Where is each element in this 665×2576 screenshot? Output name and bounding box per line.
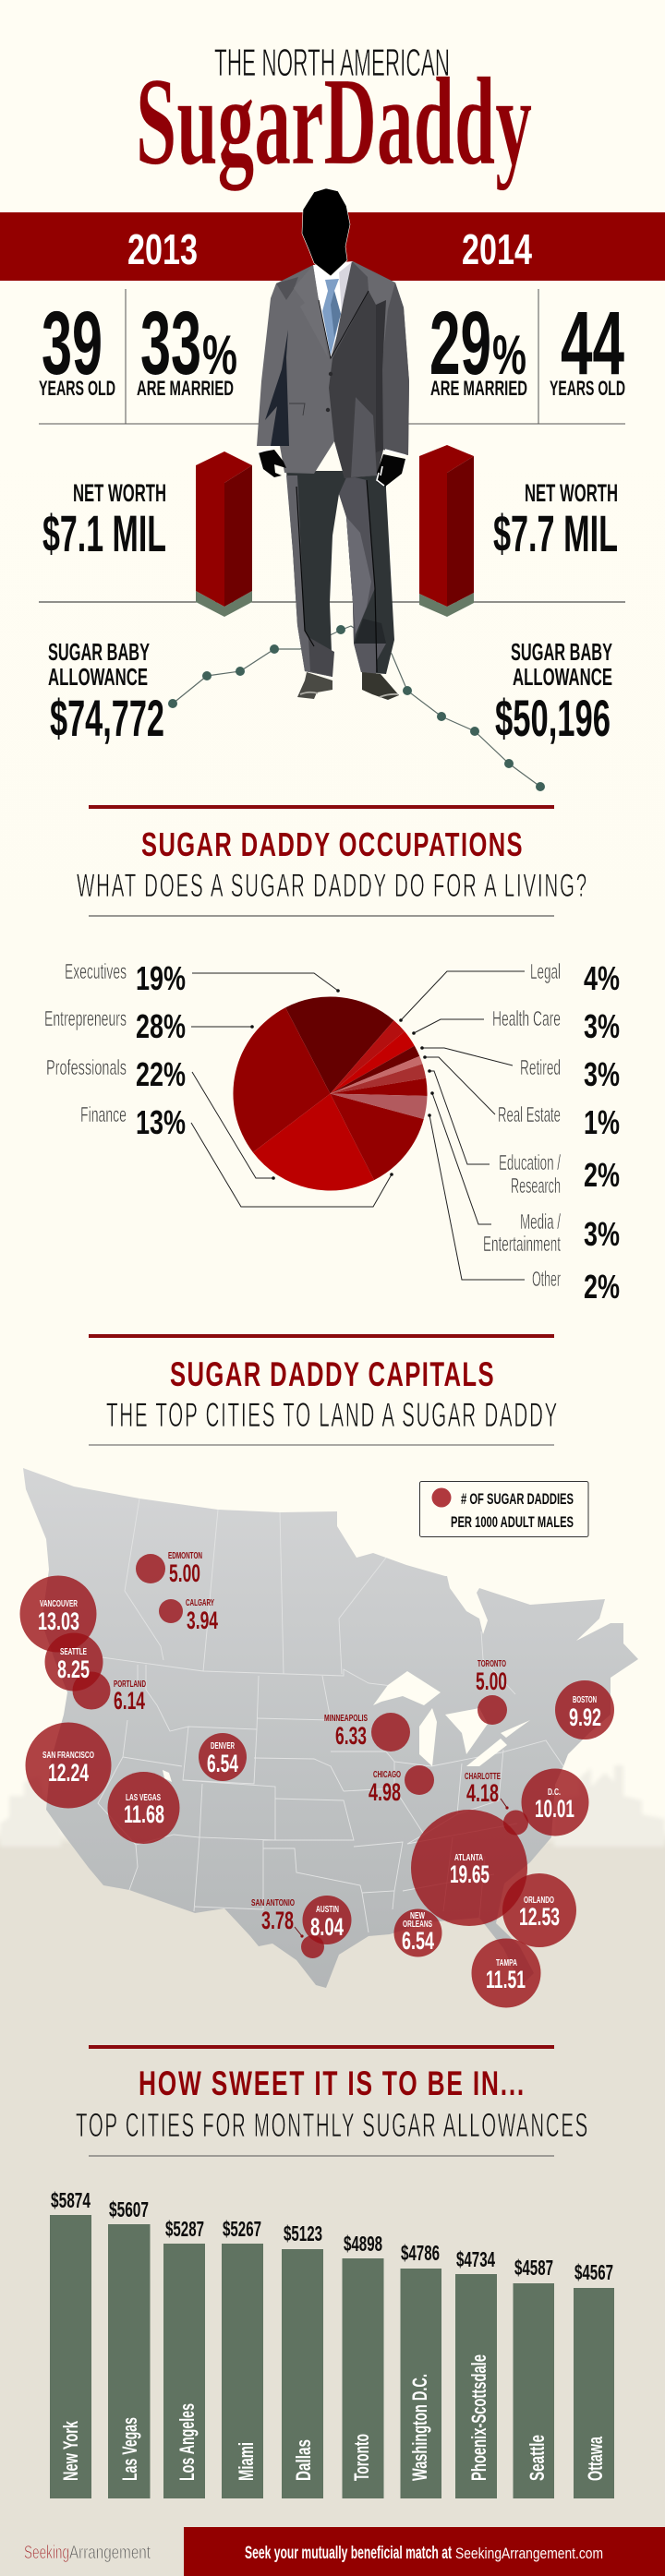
pie labels left: 28% — [136, 1007, 186, 1045]
allowance line chart — [168, 625, 545, 791]
year 2014: 2014 — [462, 225, 532, 273]
legend box: PER 1000 ADULT MALES — [451, 1513, 574, 1531]
pie labels right: 4% — [584, 959, 620, 997]
bubble: Vancouver — [20, 1575, 96, 1653]
pie labels right: Media / — [520, 1210, 561, 1234]
right sleeve — [381, 283, 409, 455]
pie labels left: Entrepreneurs — [44, 1006, 127, 1030]
net worth bar 2014 — [419, 445, 474, 617]
stat: 29% are married: ARE MARRIED — [430, 377, 527, 400]
great lakes — [163, 1671, 530, 1782]
bubble: Charlotte: 4.18 — [466, 1779, 499, 1807]
pie labels right: Entertainment — [483, 1232, 561, 1256]
pie labels right: Health Care — [492, 1006, 561, 1030]
bar: Washington D.C.: Washington D.C. — [408, 2374, 431, 2481]
bar: New York — [50, 2188, 91, 2498]
allowance 2014 — [495, 638, 612, 747]
bar: Miami — [222, 2217, 263, 2498]
stat: 44 years old: 44 — [561, 293, 624, 393]
allowance 2013: SUGAR BABY — [48, 638, 150, 666]
year 2013: 2013 — [127, 225, 198, 273]
bubble: Seattle — [44, 1632, 103, 1691]
bubble: New Orleans: 6.54 — [402, 1927, 434, 1955]
bubble: Edmonton: EDMONTON — [168, 1551, 202, 1561]
net worth bar 2013 — [196, 451, 252, 617]
bubble: Denver — [199, 1733, 247, 1781]
bubble: Atlanta: 19.65 — [450, 1860, 490, 1888]
stat: 44 years old — [550, 293, 625, 400]
bubble: Orlando — [502, 1873, 576, 1947]
bar: Washington D.C. — [401, 2241, 441, 2498]
bar: Dallas: Dallas — [292, 2439, 315, 2481]
bubble: Boston — [555, 1680, 614, 1739]
bubble: Tampa: 11.51 — [486, 1966, 526, 1993]
bar: Seattle: Seattle — [526, 2435, 549, 2481]
bubble: Toronto: 5.00 — [476, 1667, 507, 1695]
footer logo: Arrangement — [69, 2543, 151, 2563]
bubble: Charlotte — [465, 1772, 528, 1836]
pie labels left: Finance — [80, 1102, 127, 1126]
bubble: San Antonio — [251, 1898, 324, 1958]
bubble: Tampa — [471, 1939, 541, 2007]
bubble: Las Vegas: 11.68 — [124, 1800, 164, 1828]
bubble: Vancouver: VANCOUVER — [40, 1599, 79, 1609]
bubble: Minneapolis: 6.33 — [335, 1722, 367, 1750]
stat: 29% are married: % — [492, 324, 526, 386]
footer logo: Seeking — [24, 2543, 69, 2563]
pie labels right: 2% — [584, 1268, 620, 1306]
stat: 39 years old — [39, 293, 115, 400]
bar: Miami: Miami — [235, 2442, 258, 2481]
pie labels right: 3% — [584, 1007, 620, 1045]
bubble: Las Vegas: LAS VEGAS — [126, 1793, 161, 1803]
bubble: Toronto: TORONTO — [478, 1659, 506, 1669]
bubble: Atlanta — [411, 1810, 527, 1926]
stat: 39 years old: 39 — [42, 293, 103, 393]
bubble: Chicago — [369, 1765, 434, 1806]
bubble: Edmonton — [136, 1551, 202, 1587]
pie labels left: 22% — [136, 1055, 186, 1093]
bubble: Minneapolis — [324, 1713, 410, 1751]
bar: Miami: $5267 — [223, 2217, 261, 2241]
pie labels right — [483, 959, 620, 1306]
bubble: D.C. — [521, 1769, 589, 1836]
tie — [322, 279, 341, 355]
bubble: San Antonio: SAN ANTONIO — [251, 1898, 295, 1908]
bar: Phoenix-Scottsdale: $4734 — [456, 2247, 495, 2271]
buttons and pocket — [289, 372, 332, 415]
jacket right shadow — [329, 291, 383, 478]
stats grid lines — [39, 289, 625, 602]
shirt — [313, 261, 353, 358]
bubble: D.C.: D.C. — [548, 1788, 561, 1798]
bar: New York: New York — [59, 2420, 82, 2481]
pie labels right: 2% — [584, 1156, 620, 1194]
allowance 2013: $74,772 — [50, 689, 164, 747]
year band — [0, 212, 665, 281]
bar: Ottawa: Ottawa — [584, 2437, 607, 2481]
bubble: Denver: DENVER — [211, 1741, 235, 1751]
bubble: Atlanta: ATLANTA — [454, 1853, 483, 1863]
bubble: Portland — [72, 1671, 146, 1715]
bar chart: monthly allowances — [50, 2188, 614, 2498]
bubble: Boston: 9.92 — [569, 1703, 601, 1731]
head silhouette — [302, 188, 350, 276]
pie labels left: Professionals — [46, 1055, 127, 1079]
allowance 2013: ALLOWANCE — [48, 663, 148, 691]
stat: 33% are married: ARE MARRIED — [137, 377, 234, 400]
bar: Los Angeles: $5287 — [165, 2217, 204, 2241]
section heading: occupations: SUGAR DADDY OCCUPATIONS — [141, 825, 524, 863]
section heading: capitals: SUGAR DADDY CAPITALS — [170, 1355, 495, 1393]
bubble: New Orleans: NEW — [410, 1911, 425, 1921]
net worth 2013: $7.1 MIL — [42, 504, 166, 562]
bubble: Calgary — [159, 1598, 218, 1634]
bubble: Austin: 8.04 — [310, 1913, 344, 1941]
footer call to action band: SeekingArrangement.com — [455, 2545, 603, 2562]
net worth 2014 — [493, 479, 618, 562]
stat: 29% are married: 29 — [429, 293, 491, 393]
bubble: Calgary: CALGARY — [186, 1598, 214, 1608]
pie labels right: Research — [511, 1174, 561, 1198]
bar: Toronto — [342, 2232, 384, 2498]
bubble: Vancouver: 13.03 — [38, 1607, 79, 1635]
bubble: Boston: BOSTON — [573, 1695, 597, 1705]
section heading: capitals — [89, 1334, 559, 1446]
pie labels right: 3% — [584, 1055, 620, 1093]
pie leader lines — [191, 971, 525, 1280]
pie labels right: 3% — [584, 1215, 620, 1253]
pie chart: occupations — [233, 996, 428, 1191]
left sleeve shadow — [265, 330, 289, 446]
bubble: Las Vegas — [107, 1772, 179, 1844]
footer call to action band: Seek your mutually beneficial match at — [245, 2544, 452, 2563]
bar: Dallas — [282, 2221, 323, 2498]
bubble: Austin: AUSTIN — [316, 1905, 339, 1915]
bubble: Chicago: 4.98 — [369, 1778, 401, 1806]
bubble: Minneapolis: MINNEAPOLIS — [324, 1714, 368, 1724]
stat: 33% are married: % — [202, 324, 237, 386]
title kicker: THE NORTH AMERICAN — [214, 41, 450, 84]
pie labels left: Executives — [65, 959, 127, 983]
bar: Seattle: $4587 — [514, 2256, 553, 2280]
pie labels right: 1% — [584, 1103, 620, 1141]
bubble: Orlando: ORLANDO — [524, 1896, 554, 1906]
footer call to action band — [184, 2527, 665, 2576]
bubble: San Antonio: 3.78 — [261, 1907, 294, 1934]
bubble: Portland: PORTLAND — [114, 1679, 146, 1690]
map of North America — [23, 1468, 638, 1988]
bar: Phoenix-Scottsdale: Phoenix-Scottsdale — [467, 2354, 490, 2481]
bubble: New Orleans: ORLEANS — [403, 1920, 432, 1930]
pie labels right: Retired — [520, 1055, 561, 1079]
bubble: Edmonton: 5.00 — [169, 1559, 200, 1587]
bar: Toronto: $4898 — [344, 2232, 382, 2256]
footer logo — [24, 2543, 151, 2563]
bubble: Seattle: 8.25 — [57, 1655, 90, 1683]
pie labels right: Legal — [530, 959, 561, 983]
bubble: New Orleans — [393, 1909, 441, 1957]
lapels — [294, 265, 328, 357]
bubble: Denver: 6.54 — [207, 1750, 238, 1777]
allowance 2014: ALLOWANCE — [513, 663, 612, 691]
header title — [136, 41, 532, 191]
skyline backdrop — [0, 1765, 665, 1847]
bar: Phoenix-Scottsdale — [455, 2247, 497, 2498]
bubble: San Francisco: 12.24 — [48, 1759, 89, 1787]
bar: Las Vegas: $5607 — [109, 2197, 149, 2221]
stat: 39 years old: YEARS OLD — [39, 377, 115, 400]
icon: faceless man in suit — [257, 188, 409, 700]
pie labels left: 19% — [136, 959, 186, 997]
bubble: Charlotte: CHARLOTTE — [465, 1772, 501, 1782]
state and province borders — [98, 1499, 563, 1932]
hands — [259, 450, 405, 487]
bubble: Tampa: TAMPA — [496, 1958, 517, 1968]
bubble: Orlando: 12.53 — [519, 1903, 560, 1931]
bubble: Toronto — [476, 1659, 507, 1725]
stat: 44 years old: YEARS OLD — [550, 377, 625, 400]
bar: Ottawa: $4567 — [574, 2260, 613, 2284]
net worth 2013: NET WORTH — [73, 479, 166, 507]
legend box: # OF SUGAR DADDIES — [461, 1490, 574, 1508]
bubble: San Francisco — [26, 1723, 111, 1808]
bar: Los Angeles: Los Angeles — [175, 2403, 199, 2481]
bubble: Seattle: SEATTLE — [60, 1647, 87, 1657]
bubble: Calgary: 3.94 — [187, 1607, 218, 1634]
pie labels left — [44, 959, 186, 1141]
bar: Dallas: $5123 — [284, 2221, 322, 2245]
net worth 2013 — [42, 479, 166, 562]
bubble: San Francisco: SAN FRANCISCO — [42, 1751, 94, 1761]
pie labels right: Other — [532, 1267, 561, 1291]
pie labels left: 13% — [136, 1103, 186, 1141]
bar: Las Vegas: Las Vegas — [118, 2417, 141, 2481]
bubble: Chicago: CHICAGO — [373, 1770, 401, 1780]
stat: 33% are married: 33 — [140, 293, 201, 393]
allowance 2013 — [48, 638, 164, 747]
section heading: occupations — [77, 805, 588, 916]
pie labels right: Education / — [499, 1150, 561, 1174]
bar: Seattle — [514, 2256, 554, 2498]
bubble: Portland: 6.14 — [114, 1687, 145, 1715]
bubble: Austin — [303, 1896, 351, 1944]
bar: Los Angeles — [163, 2217, 205, 2498]
pie labels right: Real Estate — [498, 1102, 561, 1126]
bar: Toronto: Toronto — [350, 2434, 373, 2481]
bar: Washington D.C.: $4786 — [401, 2241, 440, 2265]
section heading: allowances — [76, 2045, 589, 2157]
legend box — [419, 1481, 588, 1536]
trousers — [286, 471, 394, 677]
bar: Las Vegas — [108, 2197, 150, 2498]
jacket — [257, 261, 409, 478]
shoes — [297, 672, 332, 699]
bar: Ottawa — [574, 2260, 614, 2498]
bubble: D.C.: 10.01 — [535, 1795, 574, 1823]
bar: New York: $5874 — [51, 2188, 91, 2212]
